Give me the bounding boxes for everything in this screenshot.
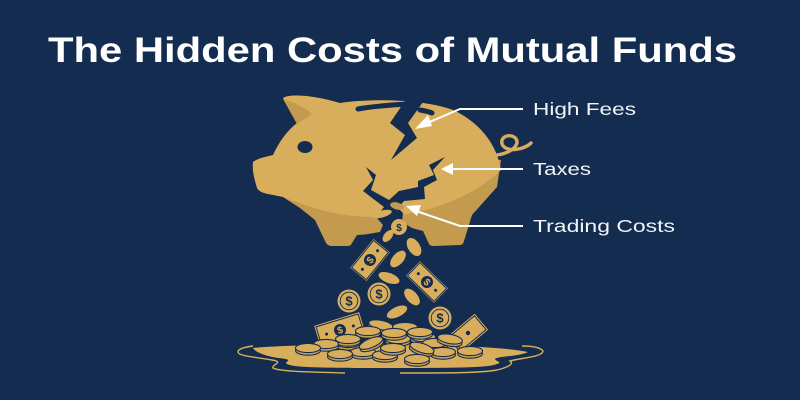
pig tail <box>497 136 531 155</box>
pile of coins <box>296 318 482 366</box>
pile: bill right <box>447 313 489 353</box>
pig lower shade <box>283 150 501 246</box>
icon: cracked piggy bank <box>253 95 531 255</box>
pile: bill left: $ <box>336 325 345 337</box>
pig ear shade <box>283 99 312 124</box>
coins spilling from crack <box>371 201 421 255</box>
pig eye <box>298 141 312 153</box>
arrow: high fees <box>415 109 523 129</box>
arrow: trading costs <box>406 205 523 226</box>
title: The Hidden Costs of Mutual Funds <box>48 31 737 70</box>
upper crack <box>390 98 423 160</box>
falling face coin 1: $ <box>375 286 383 302</box>
lower crack <box>357 157 445 250</box>
falling bill 1: $ <box>365 255 377 266</box>
label: trading costs: Trading Costs <box>533 216 675 236</box>
label: taxes: Taxes <box>533 159 591 179</box>
falling bill 2 <box>405 261 449 303</box>
pig body <box>253 95 501 217</box>
falling bill 1 <box>349 238 391 282</box>
falling face coin 3: $ <box>436 310 444 326</box>
puddle of gold <box>238 344 543 373</box>
coin slot <box>358 104 432 113</box>
label: high fees: High Fees <box>533 99 636 119</box>
falling face coin 2: $ <box>345 294 353 308</box>
coins spilling from crack: $ <box>396 223 402 234</box>
falling bill 2: $ <box>420 277 432 289</box>
arrow: taxes <box>441 163 523 175</box>
falling face coin 2 <box>338 290 360 312</box>
pile: bill left <box>314 312 366 348</box>
falling face coin 3 <box>428 306 452 330</box>
falling tilted coins <box>377 235 424 321</box>
falling face coin 1 <box>368 282 390 306</box>
